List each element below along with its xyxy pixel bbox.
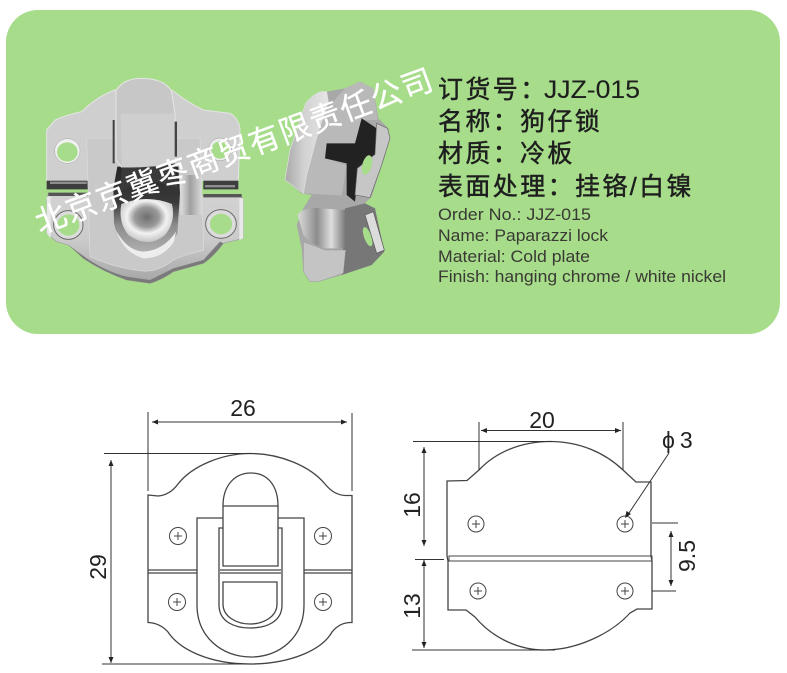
lower left hole <box>54 211 83 239</box>
lower right hole <box>206 210 236 238</box>
dimension: upper height 16 <box>399 442 552 560</box>
hasp inner slot <box>219 528 282 628</box>
dimension: lower height 13 <box>399 560 555 650</box>
tongue side shadows <box>113 120 177 163</box>
name: 狗仔锁 <box>520 108 602 136</box>
order number: Order No.: JJZ-015 <box>438 206 591 224</box>
pin <box>365 212 384 253</box>
diagram: back view of plate <box>447 442 652 650</box>
silhouette <box>285 82 390 282</box>
cup recess <box>113 167 180 257</box>
hinge <box>148 570 352 573</box>
callout: hole diameter: ϕ3 <box>662 427 693 453</box>
knuckle <box>298 208 346 248</box>
upper plate <box>47 90 240 181</box>
lower plate <box>47 193 243 283</box>
front cover <box>285 91 328 193</box>
outline: plate <box>148 454 352 664</box>
panel: product background <box>6 10 780 334</box>
lower plate shadow <box>68 242 223 283</box>
dimension: hole spacing 20 <box>479 407 623 470</box>
lower window <box>223 582 277 624</box>
screws <box>468 516 633 599</box>
photo: latch front view <box>47 78 243 283</box>
flange with hole <box>355 123 390 198</box>
name: 名称： <box>438 108 520 136</box>
hinge <box>449 556 652 561</box>
upper left hole <box>55 139 80 163</box>
watermark: company name: 北京京冀枣商贸有限责任公司 <box>28 54 440 242</box>
lower rear part <box>342 203 384 275</box>
inner face <box>303 82 378 196</box>
dimension: hole spacing 20: 20 <box>529 407 555 433</box>
finish: 表面处理： <box>438 173 575 201</box>
material: Material: Cold plate <box>438 248 590 266</box>
dimension: width 26 <box>148 395 352 491</box>
finish: Finish: hanging chrome / white nickel <box>438 268 726 286</box>
dimension: upper height 16: 16 <box>399 492 425 518</box>
text block: Chinese specifications <box>438 76 694 201</box>
material: 材质： <box>438 140 520 168</box>
dimension: width 26: 26 <box>230 395 256 421</box>
diagram: front view of latch <box>148 454 352 664</box>
upper right hole <box>209 138 231 161</box>
text block: English specifications <box>438 206 726 286</box>
U-shaped hasp <box>197 518 304 657</box>
dimension: lower height 13: 13 <box>399 593 425 619</box>
material: 冷板 <box>520 140 575 168</box>
dimension: height 29 <box>85 454 255 664</box>
tongue <box>116 78 175 167</box>
cup bowl <box>121 199 173 242</box>
name: Name: Paparazzi lock <box>438 227 609 245</box>
hasp <box>87 138 204 271</box>
hasp bright strip <box>180 175 203 215</box>
finish: 挂铬/白镍 <box>575 173 694 201</box>
photo: latch side view <box>285 82 390 282</box>
order number value: JJZ-015 <box>544 76 640 104</box>
callout: hole diameter <box>625 427 693 518</box>
screws <box>168 528 332 610</box>
order number: 订货号： <box>438 76 548 104</box>
dimension: hole spacing 9.5: 9.5 <box>674 540 700 572</box>
dark recess <box>325 118 377 202</box>
outline: plate <box>447 442 652 650</box>
tongue <box>223 473 278 566</box>
dimension: hole spacing 9.5 <box>652 523 700 591</box>
lower wing <box>303 242 346 282</box>
dark bands <box>47 181 238 189</box>
dimension: height 29: 29 <box>85 554 111 580</box>
